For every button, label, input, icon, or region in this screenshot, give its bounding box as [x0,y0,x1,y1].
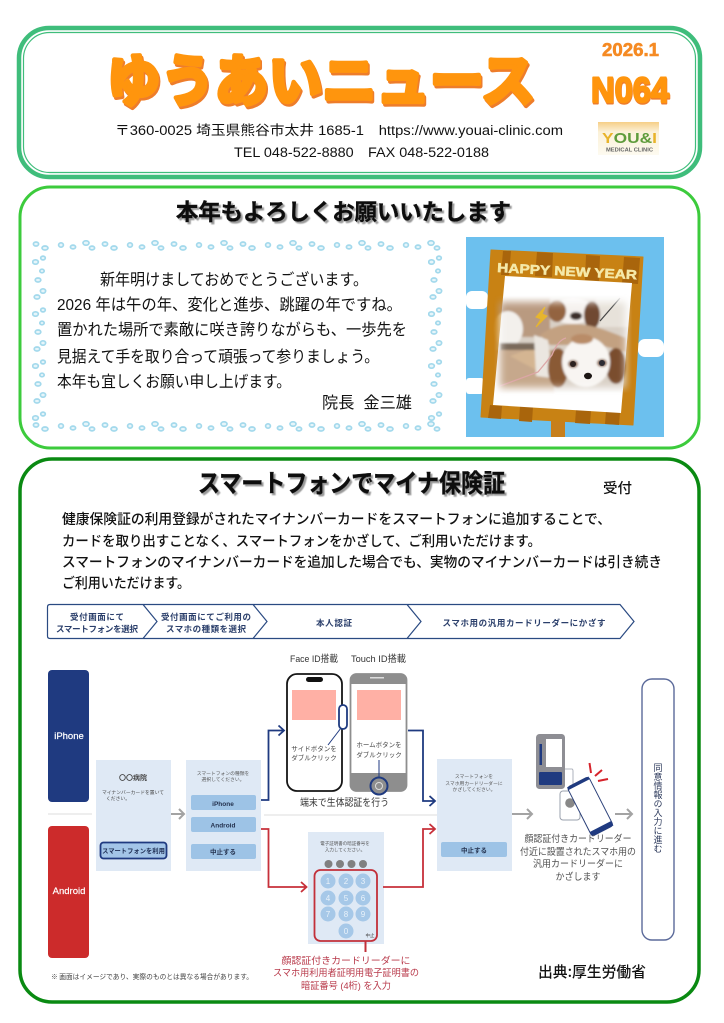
explanatory paragraph: カードを取り出すことなく、スマートフォンをかざして、ご利用いただけます。 [62,533,541,549]
explanatory paragraph [62,511,662,591]
heading: smartphone My Number insurance: スマートフォンでマイナ保険証 [198,464,505,500]
step chevrons: 本人認証 [316,618,352,628]
address line: 〒360-0025 埼玉県熊谷市太井 1685-1 https://www.youai-clinic.com [115,123,563,138]
explanatory paragraph: 健康保険証の利用登録がされたマイナンバーカードをスマートフォンに追加することで、 [62,511,611,527]
step chevrons: スマートフォンを選択 [56,624,138,634]
caption: hold over reader: かざします [556,871,600,883]
step chevrons: 受付画面にて [70,612,124,622]
screen: reception start [96,760,171,871]
phone: Touch ID: ダブルクリック [356,750,402,759]
labels: Face ID and Touch ID: Face ID搭載 [290,653,338,665]
arrow: iPhone to biometric [261,726,284,800]
photo: dogs in Happy New Year sign: HAPPY NEW YEAR [497,260,638,282]
source credit: 出典:厚生労働省 [538,961,646,982]
screen: PIN entry: 9 [361,910,366,919]
telephone and fax line: TEL 048-522-8880 FAX 048-522-0188 [234,145,489,160]
greeting message: 見据えて手を取り合って頑張って参りましょう。 [57,348,379,366]
screen: hold over reader: スマートフォンを [455,773,493,780]
logo: YOU&I Medical Clinic: YOU& I [602,130,657,147]
box: proceed to consent input: 同意情報の入力に進む [652,763,664,853]
explanatory paragraph: ご利用いただけます。 [62,575,190,591]
screen: smartphone type selection: Android [211,822,235,830]
step chevrons: スマホ用の汎用カードリーダーにかざす [442,618,606,628]
screen: hold over reader: かざしてください。 [453,786,495,793]
dotted frame [32,240,446,434]
screen: smartphone type selection: iPhone [212,801,234,808]
footnote: ※ 画面はイメージであり、実際のものとは異なる場合があります。 [51,972,253,982]
phone: Touch ID [350,674,407,794]
phone: Face ID: ダブルクリック [291,753,337,762]
screen: smartphone type selection: スマートフォンの種類を [197,770,250,777]
caption: hold over reader: 汎用カードリーダーに [533,858,623,870]
row label: iPhone [48,670,89,802]
caption: biometric authentication: 端末で生体認証を行う [300,794,389,809]
phone: Touch ID: ホームボタンを [356,740,402,749]
screen: PIN entry: 1 [326,877,331,886]
screen: smartphone type selection: 中止する [210,847,236,856]
greeting message [57,270,412,412]
screen: PIN entry: 0 [344,927,349,936]
phone: Face ID: サイドボタンを [291,744,337,753]
screen: PIN entry: 2 [344,877,349,886]
caption: hold over reader: 付近に設置されたスマホ用の [520,846,636,858]
box: proceed to consent input [642,679,674,940]
labels: Face ID and Touch ID: Touch ID搭載 [351,653,406,665]
arrow: biometric to reader screen [408,730,435,806]
greeting message: 置かれた場所で素敵に咲き誇りながらも、一歩先を [57,321,407,339]
caption: PIN entry [273,955,419,992]
screen: smartphone type selection [186,760,261,871]
screen: PIN entry: 4 [326,894,331,903]
screen: hold over reader [437,759,512,871]
screen: smartphone type selection: 選択してください。 [202,776,244,783]
title: ゆうあいニュース: ゆうあいニュース [107,37,535,118]
photo: dogs in Happy New Year sign [466,237,664,437]
screen: hold over reader: スマホ用カードリーダーに [445,780,503,787]
row label: Android [48,826,89,958]
phone: Face ID [287,674,347,791]
labels: Face ID and Touch ID [290,653,406,665]
caption: hold over reader [520,833,636,883]
panel: My Number health insurance on smartphone [20,459,699,1002]
panel: newsletter header [19,28,700,177]
arrow: Android to PIN entry [261,829,306,892]
screen: reception start: ください。 [106,795,130,802]
logo: YOU&I Medical Clinic: MEDICAL CLINIC [606,148,653,154]
screen: PIN entry: 7 [326,910,331,919]
screen: PIN entry: 電子証明書の暗証番号を [320,840,370,847]
caption: hold over reader: 顔認証付きカードリーダー [524,833,632,845]
greeting message: 本年も宜しくお願い申し上げます。 [57,373,291,391]
arrow: to reader [512,809,532,819]
heading: new year greeting: 本年もよろしくお願いいたします [176,195,511,227]
icon: card reader with smartphone [536,734,613,836]
arrow: to smartphone type selection [171,809,184,819]
step chevrons: スマホの種類を選択 [166,624,246,634]
caption: PIN entry: 顔認証付きカードリーダーに [282,955,410,967]
step chevrons: 受付画面にてご利用の [161,612,251,622]
screen: PIN entry [308,832,384,952]
screen: reception start: マイナンバーカードを置いて [102,789,164,796]
arrow: to consent [615,809,632,819]
issue number: N064 [591,71,669,110]
screen: PIN entry: 6 [361,894,366,903]
screen: reception start: 〇〇病院 [119,773,147,782]
greeting message: 新年明けましておめでとうございます。 [100,270,368,289]
screen: PIN entry: 8 [344,910,349,919]
screen: PIN entry: 3 [361,877,366,886]
screen: reception start: スマートフォンを利用 [102,846,165,855]
screen: PIN entry: 5 [344,894,349,903]
explanatory paragraph: スマートフォンのマイナンバーカードを追加した場合でも、実物のマイナンバーカードは引き続き [62,554,662,570]
arrow: PIN entry to reader screen [383,824,435,887]
screen: hold over reader: 中止する [461,844,487,854]
step chevrons [48,604,634,638]
screen: PIN entry: 中止 [366,932,375,939]
greeting message: 2026 年は午の年、変化と進歩、跳躍の年ですね。 [57,296,402,314]
row label: iPhone: iPhone [54,731,84,742]
caption: PIN entry: 暗証番号 (4桁) を入力 [301,980,391,992]
screen: PIN entry: 入力してください。 [325,846,365,854]
label: reception: 受付 [603,478,632,498]
row label: Android: Android [53,886,85,897]
logo: YOU&I Medical Clinic [598,122,659,155]
greeting message: 院長 金三雄 [322,394,412,412]
issue date: 2026.1 [602,40,659,60]
panel: new year greeting [20,187,699,448]
caption: PIN entry: スマホ用利用者証明用電子証明書の [273,967,419,979]
